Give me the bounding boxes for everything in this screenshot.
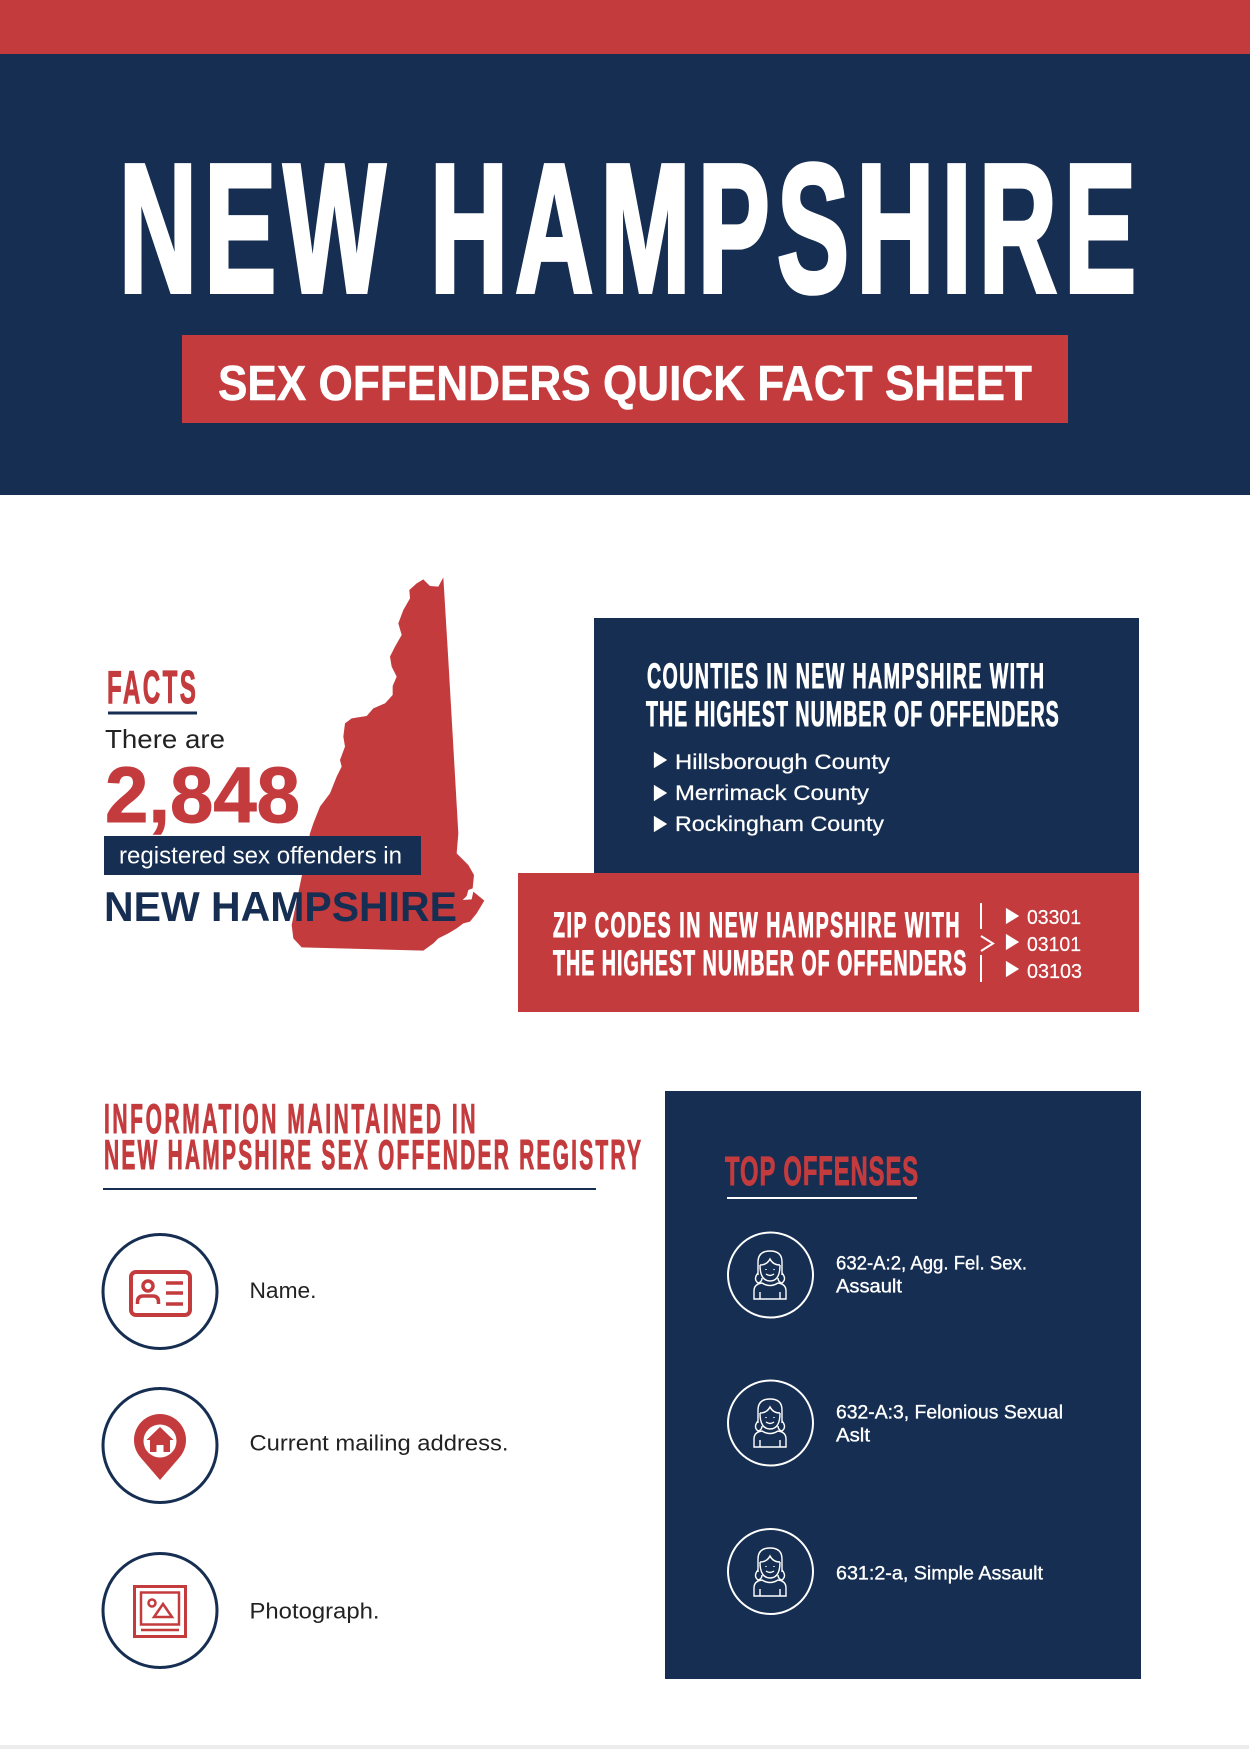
map: New Hampshire state silhouette [292,577,484,951]
counties list: Merrimack County [675,781,869,805]
counties heading: THE HIGHEST NUMBER OF OFFENDERS [646,695,1059,735]
registered label bar: registered sex offenders in [119,842,402,870]
icon: woman [754,1548,786,1596]
zip list: 03103 [1027,960,1082,983]
there are: There are [105,724,225,754]
subtitle banner: SEX OFFENDERS QUICK FACT SHEET [218,357,1032,411]
title: NEW HAMPSHIRE [119,126,1136,330]
subtitle banner [182,335,1068,423]
zip list [1006,906,1082,983]
zip heading: THE HIGHEST NUMBER OF OFFENDERS [553,944,966,984]
state name: NEW HAMPSHIRE [104,883,457,930]
counties list [654,750,890,836]
registry item: photograph: Photograph. [250,1598,380,1624]
zip heading [553,906,966,984]
facts heading: FACTS [107,660,196,713]
counties heading [646,657,1059,735]
offense 2 [728,1380,1063,1466]
facts block [104,660,457,930]
registry heading: NEW HAMPSHIRE SEX OFFENDER REGISTRY [104,1132,641,1179]
offense 1: Assault [836,1276,903,1298]
icon: woman [754,1251,786,1299]
registry heading: INFORMATION MAINTAINED IN [104,1096,476,1143]
registry item: name [103,1234,316,1348]
top offenses heading: TOP OFFENSES [725,1150,918,1195]
offense 3: 631:2-a, Simple Assault [836,1562,1044,1584]
offense 1 [728,1232,1027,1318]
big number: 2,848 [105,750,300,839]
icon: photo frame [134,1586,186,1636]
offense 3 [728,1529,1044,1614]
registry item: mailing address: Current mailing address. [250,1430,508,1456]
header band [0,0,1250,495]
offense 2: Aslt [836,1424,871,1446]
panel: counties [594,618,1139,873]
icon: location pin with house [134,1414,186,1480]
zip list: 03301 [1027,906,1081,929]
bracket arrow [981,903,993,982]
registry item: mailing address [103,1388,508,1502]
zip list: 03101 [1027,933,1081,956]
panel: top offenses [665,1091,1141,1679]
zip heading: ZIP CODES IN NEW HAMPSHIRE WITH [553,906,960,946]
registry item: name: Name. [250,1278,316,1303]
counties list: Rockingham County [675,812,884,836]
icon: woman [754,1399,786,1447]
offense 2: 632-A:3, Felonious Sexual [836,1402,1063,1424]
counties list: Hillsborough County [675,750,890,774]
counties heading: COUNTIES IN NEW HAMPSHIRE WITH [647,657,1044,697]
registered label bar [104,836,421,875]
icon: id card [131,1272,190,1315]
registry item: photograph [103,1554,380,1668]
panel: zip codes [518,873,1139,1012]
offense 1: 632-A:2, Agg. Fel. Sex. [836,1252,1027,1274]
registry heading [103,1096,641,1190]
